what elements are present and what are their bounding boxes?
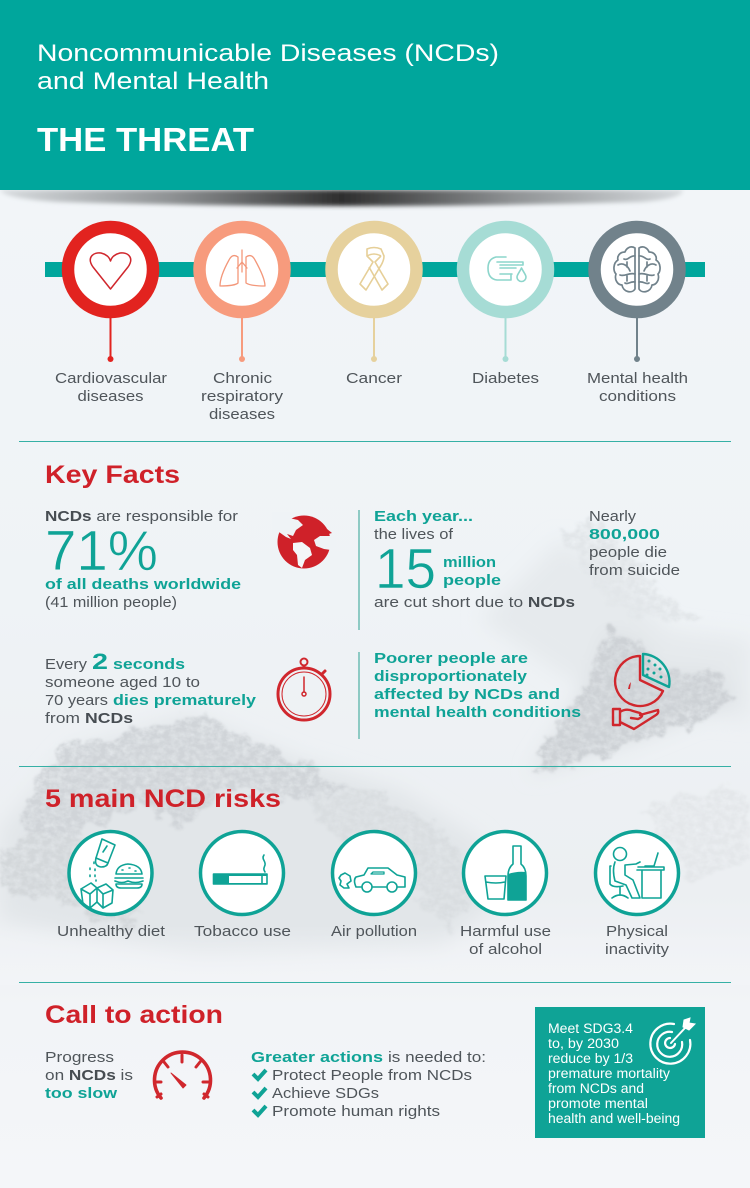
icon: salt, burger, sugar cubes (81, 839, 143, 908)
callout text: promote mental (548, 1096, 648, 1111)
risk: unhealthy diet (57, 832, 166, 940)
text: progress too slow: Progress (45, 1049, 114, 1066)
fact: every 2 seconds: 2 (92, 649, 108, 674)
text: progress too slow (45, 1049, 133, 1102)
header background (0, 0, 750, 190)
icon: globe (272, 512, 336, 568)
fact: every 2 seconds: Every (45, 656, 88, 673)
label (605, 923, 670, 958)
title: Noncommunicable Diseases (NCDs) (37, 40, 499, 67)
heading: key facts: Key Facts (45, 461, 180, 489)
label: Mental health (587, 370, 688, 387)
header band (0, 0, 750, 206)
heading: call to action: Call to action (45, 1001, 223, 1029)
list: greater actions (251, 1049, 486, 1120)
fact: every 2 seconds: seconds (113, 656, 185, 673)
risk: physical inactivity (596, 832, 678, 958)
disease: chronic respiratory (200, 227, 284, 423)
icon: bottle and glass (485, 846, 526, 900)
label: Diabetes (472, 370, 539, 387)
label: Tobacco use (194, 923, 291, 940)
icon: heart (90, 253, 131, 289)
callout text: Meet SDG3.4 (548, 1021, 633, 1036)
fact: suicide: from suicide (589, 562, 680, 579)
fact: 71 percent: NCDs are responsible for (45, 508, 238, 525)
text: progress too slow: too slow (45, 1085, 117, 1102)
fact: every 2 seconds: 70 years (45, 692, 108, 709)
title: and Mental Health (37, 68, 269, 95)
fact: every 2 seconds: dies prematurely (113, 692, 257, 709)
fact: 71 percent: of all deaths worldwide (45, 576, 241, 593)
fact: 15 million: Each year... (374, 508, 473, 525)
fact: suicide: people die (589, 544, 667, 561)
risk: air pollution (331, 832, 417, 940)
title (37, 40, 499, 95)
label: Harmful use (460, 923, 551, 940)
list item: protect people: Protect People from NCDs (272, 1067, 472, 1084)
callout text: health and well-being (548, 1111, 680, 1126)
fact: poorer people (374, 650, 581, 721)
disease: cardiovascular (55, 227, 167, 405)
callout text: from NCDs and (548, 1081, 644, 1096)
list: greater actions: is needed to: (388, 1049, 486, 1066)
fact: 15 million: million (443, 554, 496, 571)
risk: tobacco (194, 832, 291, 940)
label (587, 370, 688, 405)
icon: car with exhaust (339, 868, 405, 892)
icon: pie chart on hand (613, 654, 669, 729)
label (460, 923, 551, 958)
label: respiratory (201, 388, 284, 405)
label: Physical (606, 923, 668, 940)
icon: stopwatch (278, 658, 330, 720)
callout text: premature mortality (548, 1066, 670, 1081)
fact: 71 percent (45, 508, 241, 611)
label: inactivity (605, 941, 670, 958)
list item: achieve SDGs: Achieve SDGs (272, 1085, 379, 1102)
icon: person at desk (610, 848, 664, 898)
disease: cancer (332, 227, 416, 387)
fact: suicide: Nearly (589, 508, 637, 525)
fact: every 2 seconds: from (45, 710, 80, 727)
label: diseases (209, 406, 275, 423)
fact: 71 percent: 71% (45, 519, 158, 583)
heading: 5 main NCD risks: 5 main NCD risks (45, 785, 281, 813)
label: Cardiovascular (55, 370, 167, 387)
fact: poorer people: disproportionately (374, 668, 528, 685)
fact: 15 million: are cut short due to NCDs (374, 594, 575, 611)
icon: speedometer (154, 1052, 211, 1098)
fact: 15 million: 15 (375, 537, 436, 601)
header shadow (0, 190, 683, 206)
fact: suicide (589, 508, 680, 579)
label (55, 370, 167, 405)
fact: poorer people: affected by NCDs and (374, 686, 560, 703)
callout text: to, by 2030 (548, 1036, 619, 1051)
fact: 15 million (374, 508, 575, 611)
label: Cancer (346, 370, 402, 387)
label: diseases (78, 388, 144, 405)
fact: 15 million: the lives of (374, 526, 454, 543)
label: Unhealthy diet (57, 923, 166, 940)
callout text (548, 1021, 680, 1126)
icon: target with arrow (650, 1018, 695, 1064)
timeline bar (45, 262, 705, 277)
label: conditions (599, 388, 676, 405)
fact: every 2 seconds (45, 649, 257, 727)
label: Chronic (213, 370, 273, 387)
fact: 15 million: people (443, 572, 501, 589)
icon: brain (614, 247, 660, 292)
callout text: reduce by 1/3 (548, 1051, 633, 1066)
fact: poorer people: Poorer people are (374, 650, 528, 667)
icon: cigarette (214, 855, 267, 884)
callout: SDG 3.4 (535, 1007, 705, 1138)
risk: alcohol (460, 832, 551, 958)
list: greater actions: Greater actions (251, 1049, 383, 1066)
fact: every 2 seconds: someone aged 10 to (45, 674, 200, 691)
text: progress too slow: on NCDs is (45, 1067, 133, 1084)
subtitle: the threat: THE THREAT (37, 121, 254, 158)
icon: finger and drop (488, 257, 526, 282)
icon: lungs (220, 250, 265, 286)
label (201, 370, 284, 423)
label: of alcohol (469, 941, 542, 958)
list item: promote human rights: Promote human rights (272, 1103, 440, 1120)
fact: every 2 seconds: NCDs (85, 710, 133, 727)
fact: suicide: 800,000 (589, 526, 660, 543)
disease: diabetes (463, 227, 548, 387)
fact: 71 percent: (41 million people) (45, 594, 177, 611)
disease: mental health (587, 227, 688, 405)
icon: ribbon (360, 248, 388, 290)
label: Air pollution (331, 923, 417, 940)
fact: poorer people: mental health conditions (374, 704, 581, 721)
